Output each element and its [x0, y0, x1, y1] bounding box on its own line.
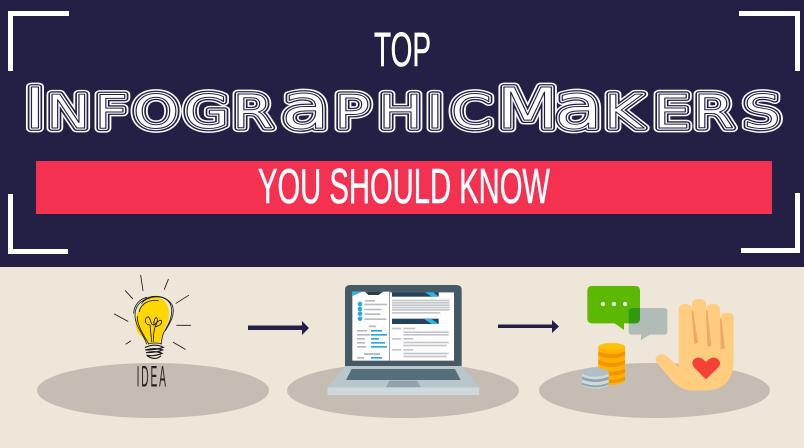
title: TOP: TOP [374, 24, 431, 77]
icon: idea light bulb [114, 275, 191, 393]
icon: laptop with resume [327, 285, 479, 395]
ground ellipse 1 [37, 363, 269, 418]
green chat bubble [587, 286, 640, 330]
header panel [0, 0, 804, 267]
grey chat bubble [629, 308, 667, 340]
banner [36, 161, 772, 214]
arrow 1 [248, 321, 309, 335]
heart [692, 358, 720, 379]
ground ellipse 3 [539, 363, 770, 418]
banner text: YOU SHOULD KNOW [258, 160, 550, 214]
resume screen [352, 292, 454, 361]
arrow 2 [498, 320, 559, 333]
label: IDEA: IDEA [137, 360, 168, 393]
corner bracket: top right [739, 11, 800, 71]
silver coin stack [582, 368, 609, 389]
corner bracket: bottom right [741, 193, 800, 253]
ground ellipse 2 [287, 363, 519, 418]
icon: chat bubbles, coins and hand [582, 286, 734, 391]
title: Infographic Makers striped lettering: INFOGRaPHIC MaKERS [25, 70, 781, 143]
hand [656, 299, 734, 391]
corner bracket: bottom left [8, 194, 68, 254]
coin stack [598, 343, 625, 385]
corner bracket: top left [8, 11, 69, 71]
